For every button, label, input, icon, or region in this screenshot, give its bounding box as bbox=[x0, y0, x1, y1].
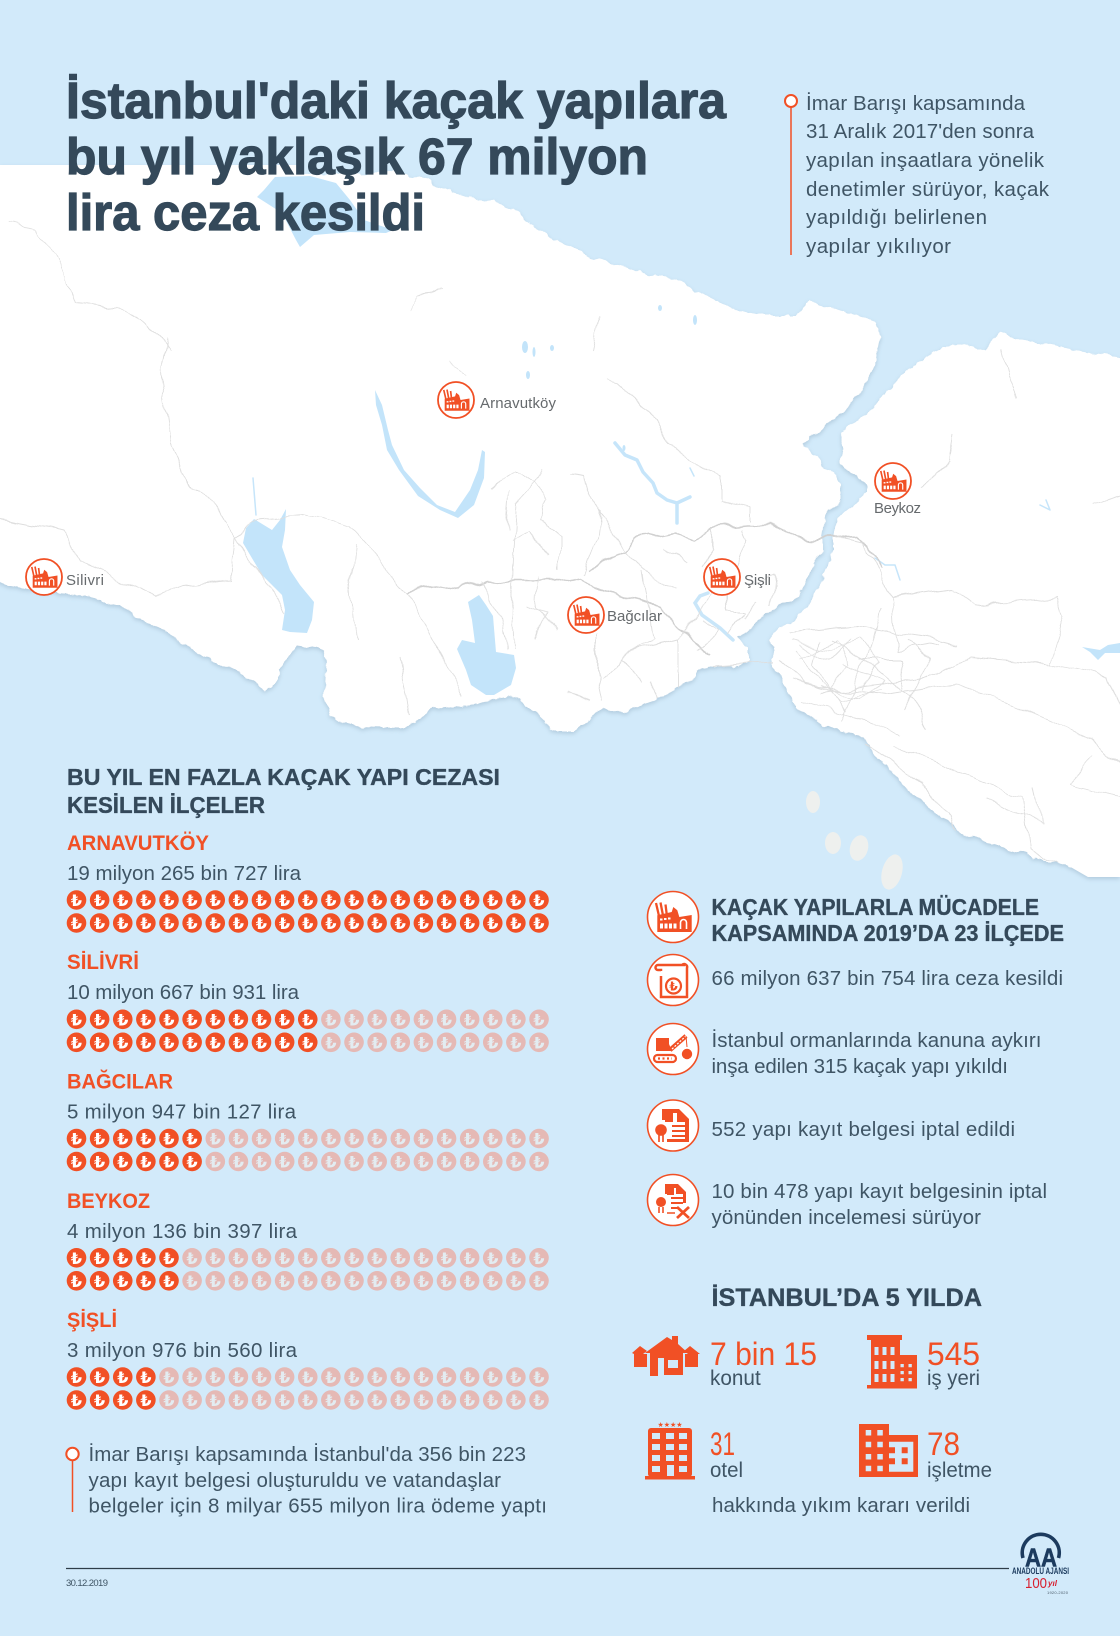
text: certificates under review: 10 bin 478 yapı kayıt belgesinin iptal bbox=[712, 1180, 1047, 1203]
stat: businesses: 78 bbox=[927, 1426, 960, 1462]
text: demolished buildings bbox=[712, 1029, 1042, 1078]
icon: certificate bbox=[648, 1100, 698, 1151]
heading: 2019 campaign: KAÇAK YAPILARLA MÜCADELE bbox=[712, 894, 1039, 920]
icon: fine document: ₺ bbox=[669, 980, 678, 994]
district: Bağcılar: BAĞCILAR bbox=[67, 1070, 173, 1094]
map marker: Silivri: Silivri bbox=[66, 572, 104, 589]
icon: certificate under review bbox=[648, 1174, 698, 1226]
top note with pin: yapılar yıkılıyor bbox=[806, 235, 951, 258]
text: certificates under review bbox=[712, 1180, 1047, 1229]
icon: hotel bbox=[645, 1421, 695, 1480]
stat: housing: 7 bin 15 bbox=[710, 1336, 817, 1372]
title bbox=[66, 72, 727, 241]
district: Bağcılar: ₺₺₺₺₺₺₺₺₺₺₺₺₺₺₺ bbox=[210, 1130, 545, 1148]
icon: demolished factory bbox=[648, 892, 698, 942]
map marker: Beykoz bbox=[874, 463, 921, 517]
district: Arnavutköy: ₺₺₺₺₺₺₺₺₺₺₺₺₺₺₺₺₺₺₺₺₺ bbox=[71, 914, 545, 933]
text: demolition order: hakkında yıkım kararı verildi bbox=[712, 1494, 970, 1517]
district: Silivri: SİLİVRİ bbox=[67, 951, 139, 974]
map marker: Bağcılar: Bağcılar bbox=[607, 608, 662, 625]
heading: districts: KESİLEN İLÇELER bbox=[67, 792, 265, 818]
district: Şişli: ₺₺₺₺₺₺₺₺₺₺₺₺₺₺₺₺₺ bbox=[163, 1391, 545, 1410]
stat: businesses bbox=[927, 1426, 992, 1482]
district: Beykoz: ₺₺₺₺₺₺₺₺₺₺₺₺₺₺₺₺ bbox=[187, 1249, 545, 1268]
text: certificates under review: yönünden incelemesi sürüyor bbox=[712, 1206, 981, 1229]
district: Bağcılar: ₺₺₺₺₺₺ bbox=[71, 1130, 198, 1148]
Golden Horn bbox=[695, 593, 733, 640]
logo: Anadolu Ajansı: yıl bbox=[1047, 1579, 1058, 1588]
footer line bbox=[66, 1568, 1009, 1570]
bottom note with pin: İmar Barışı kapsamında İstanbul'da 356 bin 223 bbox=[88, 1443, 526, 1466]
district: Şişli: 3 milyon 976 bin 560 lira bbox=[67, 1339, 298, 1362]
stat: housing bbox=[710, 1336, 817, 1390]
icon: office buildings bbox=[867, 1335, 917, 1388]
map of Istanbul bbox=[0, 165, 1120, 892]
title: İstanbul'daki kaçak yapılara bbox=[66, 72, 727, 129]
district: Beykoz: 4 milyon 136 bin 397 lira bbox=[67, 1220, 298, 1243]
top note with pin bbox=[785, 92, 1050, 258]
stat: housing: konut bbox=[710, 1367, 761, 1390]
district: Beykoz: ₺₺₺₺₺ bbox=[71, 1249, 175, 1268]
logo: Anadolu Ajansı: 100 bbox=[1025, 1575, 1047, 1592]
icon: business block bbox=[859, 1424, 918, 1477]
district: Bağcılar: ₺₺₺₺₺₺₺₺₺₺₺₺₺₺₺ bbox=[210, 1152, 545, 1172]
map marker: Silivri bbox=[26, 559, 104, 595]
panel: five-year demolition orders bbox=[632, 1284, 992, 1517]
stat: workplaces: iş yeri bbox=[927, 1367, 980, 1390]
district: Arnavutköy: ARNAVUTKÖY bbox=[67, 832, 209, 855]
stat: workplaces bbox=[927, 1336, 980, 1390]
stat: hotels: 31 bbox=[710, 1426, 735, 1462]
top note with pin: yapıldığı belirlenen bbox=[806, 206, 987, 229]
heading: 2019 campaign: KAPSAMINDA 2019’DA 23 İLÇEDE bbox=[712, 920, 1064, 946]
district: Şişli: ₺₺₺₺₺₺₺₺₺₺₺₺₺₺₺₺₺ bbox=[163, 1368, 545, 1387]
district: Silivri: ₺₺₺₺₺₺₺₺₺₺ bbox=[325, 1010, 545, 1029]
map marker: Arnavutköy bbox=[438, 382, 556, 418]
text: demolished buildings: İstanbul ormanlarında kanuna aykırı bbox=[712, 1029, 1042, 1052]
heading: districts bbox=[67, 764, 500, 818]
bottom note with pin: yapı kayıt belgesi oluşturuldu ve vatandaşlar bbox=[88, 1469, 501, 1492]
top note with pin: 31 Aralık 2017'den sonra bbox=[806, 120, 1035, 143]
district: Şişli: ₺₺₺₺ bbox=[71, 1368, 151, 1387]
heading: 2019 campaign bbox=[712, 894, 1064, 946]
district: Arnavutköy: ₺₺₺₺₺₺₺₺₺₺₺₺₺₺₺₺₺₺₺₺₺ bbox=[71, 891, 545, 910]
title: lira ceza kesildi bbox=[66, 184, 425, 241]
district: Bağcılar: ₺₺₺₺₺₺ bbox=[71, 1152, 198, 1172]
district: Silivri: ₺₺₺₺₺₺₺₺₺₺₺ bbox=[71, 1033, 313, 1052]
heading: districts: BU YIL EN FAZLA KAÇAK YAPI CEZASI bbox=[67, 764, 500, 790]
district: Şişli: ₺₺₺₺ bbox=[71, 1391, 151, 1410]
heading: five years: İSTANBUL’DA 5 YILDA bbox=[712, 1284, 982, 1312]
stat: workplaces: 545 bbox=[927, 1336, 980, 1372]
icon: fine document bbox=[648, 954, 698, 1006]
text: demolished buildings: inşa edilen 315 kaçak yapı yıkıldı bbox=[712, 1055, 1008, 1078]
district: Beykoz: ₺₺₺₺₺₺₺₺₺₺₺₺₺₺₺₺ bbox=[187, 1272, 545, 1291]
top note with pin: yapılan inşaatlara yönelik bbox=[806, 149, 1045, 172]
district: Beykoz bbox=[67, 1190, 545, 1291]
date: 30.12.2019 bbox=[66, 1578, 108, 1589]
logo: Anadolu Ajansı: 1920-2020 bbox=[1047, 1590, 1069, 1595]
land masses bbox=[0, 165, 1120, 877]
top note with pin: İmar Barışı kapsamında bbox=[806, 92, 1026, 115]
district: Silivri: ₺₺₺₺₺₺₺₺₺₺ bbox=[325, 1033, 545, 1052]
map marker: Bağcılar bbox=[568, 597, 662, 633]
text: cancelled certificates: 552 yapı kayıt belgesi iptal edildi bbox=[712, 1118, 1015, 1141]
map marker: Şişli bbox=[704, 559, 771, 595]
text: fines: 66 milyon 637 bin 754 lira ceza kesildi bbox=[712, 967, 1063, 990]
district: Şişli bbox=[67, 1309, 545, 1410]
stat: hotels: otel bbox=[710, 1459, 743, 1482]
title: bu yıl yaklaşık 67 milyon bbox=[66, 128, 648, 185]
district: Arnavutköy bbox=[67, 832, 545, 933]
district: Silivri: ₺₺₺₺₺₺₺₺₺₺₺ bbox=[71, 1010, 313, 1029]
district: Şişli: ŞİŞLİ bbox=[67, 1309, 117, 1332]
district: Beykoz: ₺₺₺₺₺ bbox=[71, 1272, 175, 1291]
lakes and reservoirs bbox=[243, 176, 1120, 695]
district: Silivri: 10 milyon 667 bin 931 lira bbox=[67, 981, 300, 1004]
district: Bağcılar bbox=[67, 1070, 545, 1172]
map marker: Arnavutköy: Arnavutköy bbox=[480, 395, 556, 412]
icon: wrecking crane bbox=[648, 1024, 698, 1074]
stat: businesses: işletme bbox=[927, 1459, 992, 1482]
bottom note with pin bbox=[66, 1443, 547, 1518]
road network bbox=[0, 223, 1120, 864]
logo: Anadolu Ajansı: AA bbox=[1025, 1542, 1057, 1572]
district: Bağcılar: 5 milyon 947 bin 127 lira bbox=[67, 1100, 297, 1124]
district: Arnavutköy: 19 milyon 265 bin 727 lira bbox=[67, 862, 302, 885]
islands bbox=[806, 791, 906, 892]
top note with pin: denetimler sürüyor, kaçak bbox=[806, 178, 1050, 201]
logo: Anadolu Ajansı bbox=[1012, 1534, 1069, 1595]
bottom note with pin: belgeler için 8 milyar 655 milyon lira ödeme yaptı bbox=[88, 1494, 547, 1518]
district: Beykoz: BEYKOZ bbox=[67, 1190, 150, 1213]
stat: hotels bbox=[710, 1426, 743, 1482]
panel: 2019 fight against illegal buildings bbox=[648, 892, 1064, 1229]
district: Silivri bbox=[67, 951, 545, 1052]
icon: houses bbox=[632, 1336, 700, 1376]
map marker: Şişli: Şişli bbox=[744, 572, 771, 589]
logo: Anadolu Ajansı: ANADOLU AJANSI bbox=[1012, 1566, 1069, 1576]
icon: hotel: ★★★★ bbox=[657, 1421, 683, 1429]
map marker: Beykoz: Beykoz bbox=[874, 500, 921, 517]
